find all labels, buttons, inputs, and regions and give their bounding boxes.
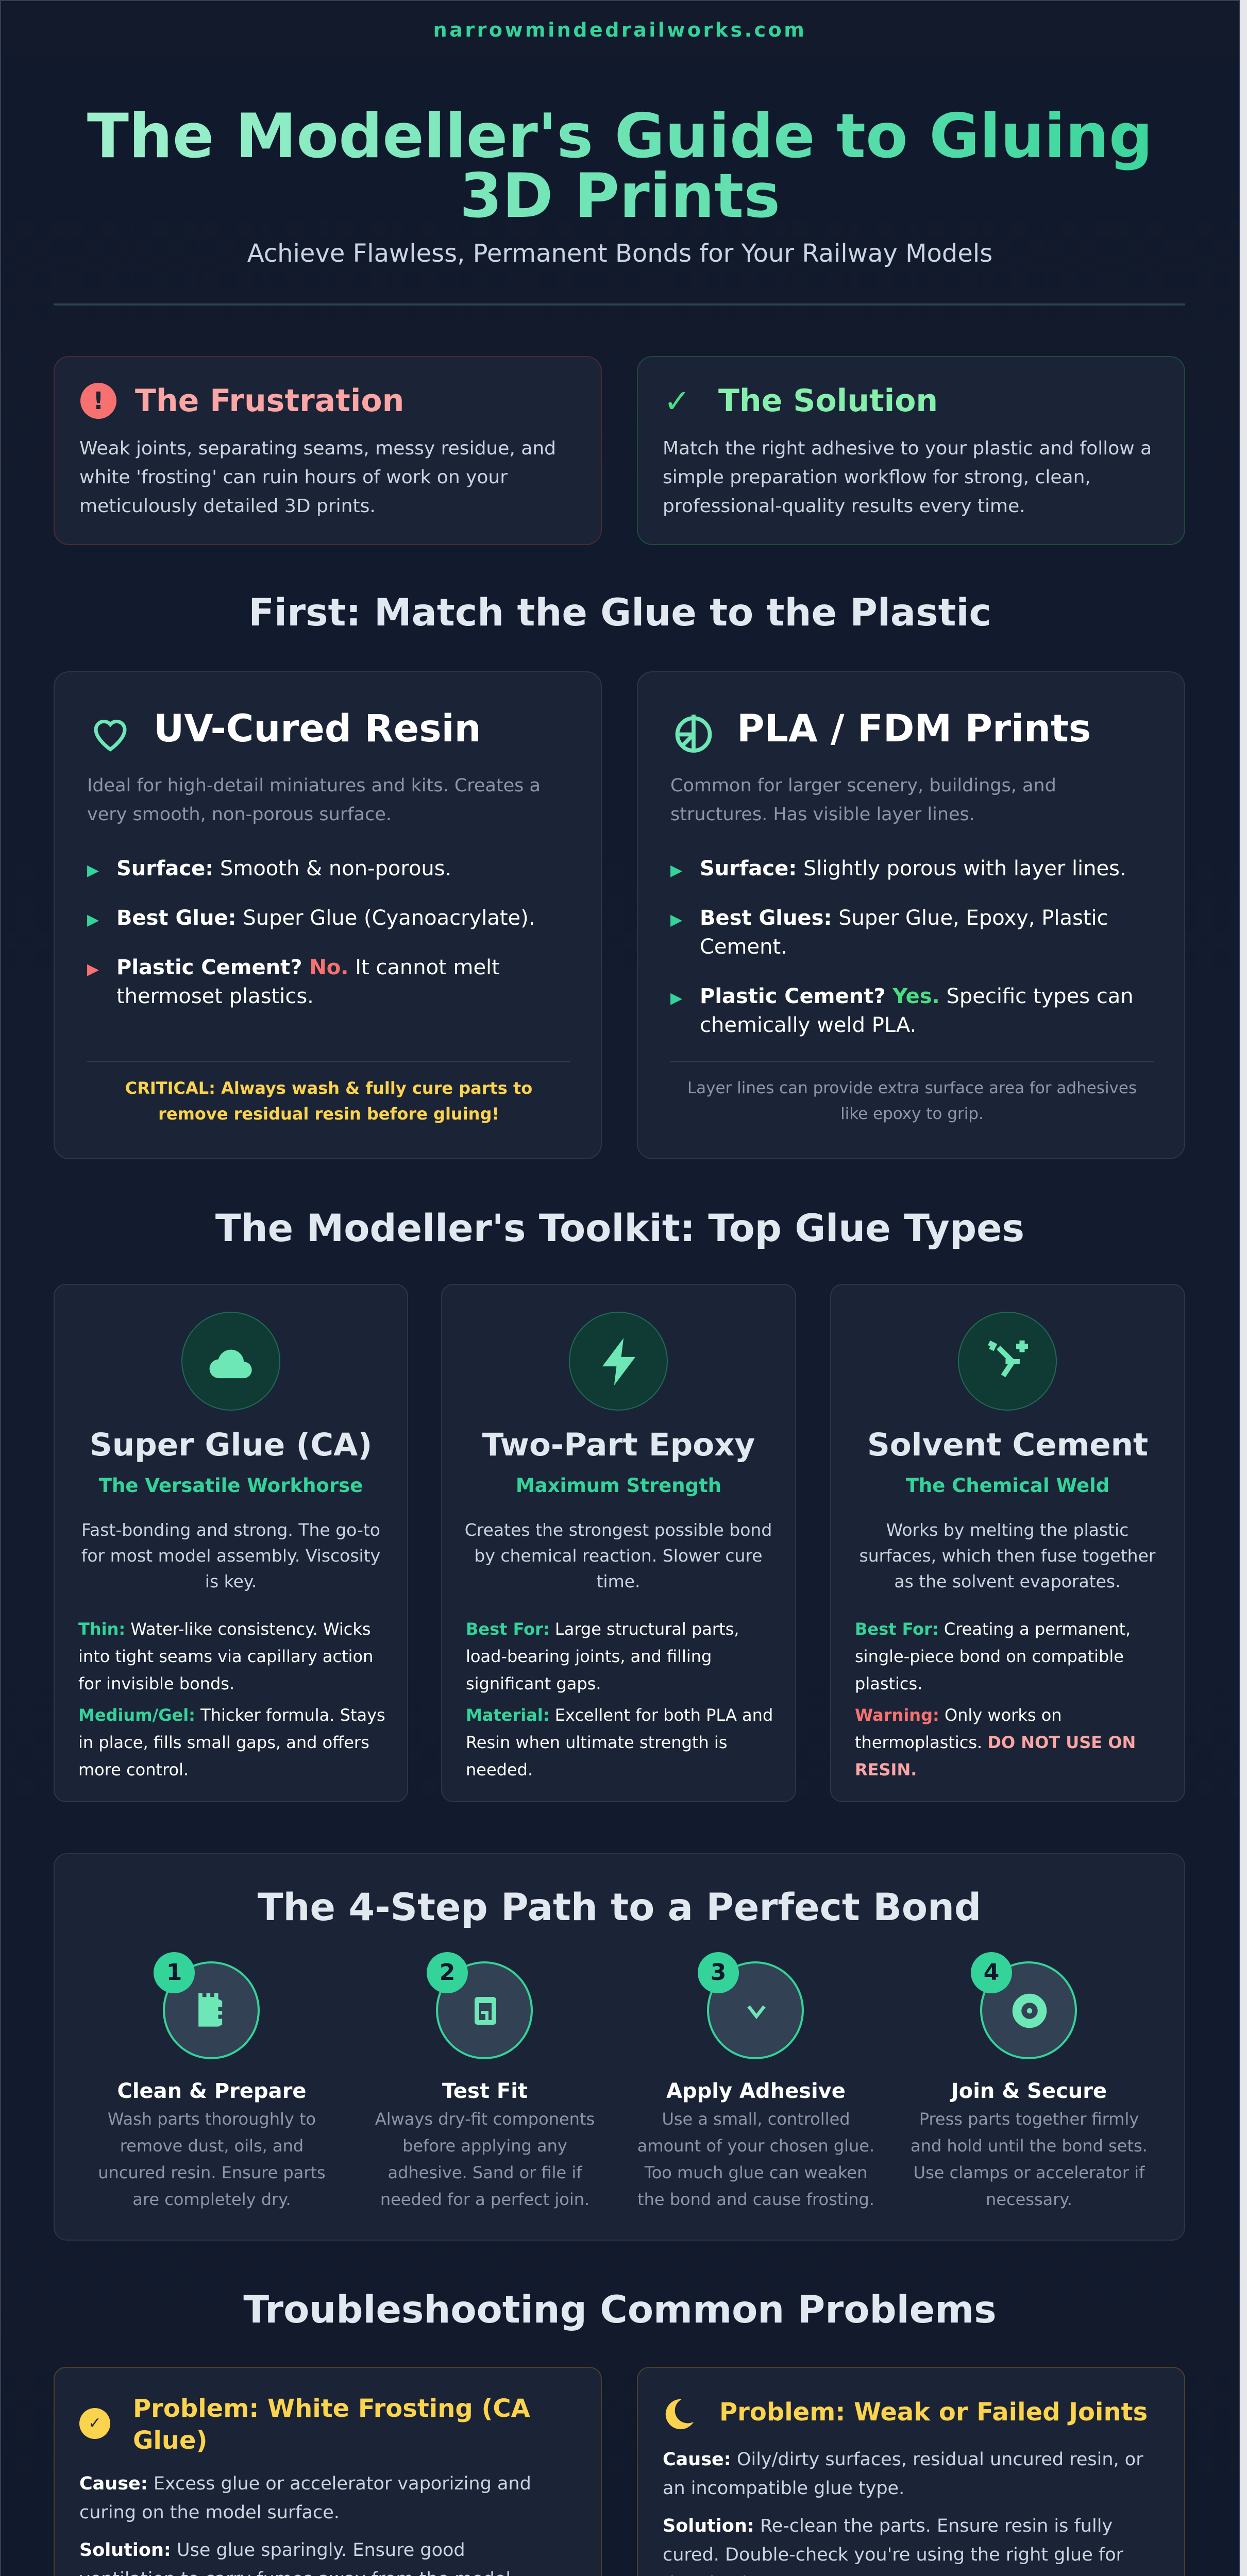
bullets: PLA [670,857,1134,1037]
step 3 [637,1952,874,2209]
subtitle: strength: Maximum Strength [516,1475,721,1497]
heading: solvent: Solvent Cement [867,1427,1148,1463]
heading: 4 steps: The 4-Step Path to a Perfect Bond [258,1886,981,1929]
bullets: PLA: ▶ [670,989,682,1007]
step 3: Apply Adhesive [666,2079,846,2103]
icon: frosting: ✓ [88,2414,102,2432]
step 1 [98,1952,326,2209]
panel: solvent [830,1284,1185,1802]
text: best for / material [466,1619,773,1780]
icon: moon [666,2399,694,2430]
title [1,107,1239,226]
text: joints cause/solution [663,2449,1143,2576]
bullets: PLA: chemically weld PLA. [700,1013,916,1037]
site url: narrowmindedrailworks.com [433,19,806,41]
icon: alert [80,383,116,419]
text: best for / warning [855,1619,1136,1780]
heading: frustration: The Frustration [135,383,404,419]
text: best for / warning: Warning: Only works on thermoplastics. DO NOT USE ON RESIN. [855,1705,1136,1780]
heading: frosting: Problem: White Frosting (CA Glue) [133,2394,530,2455]
panel: frustration [54,356,602,545]
subtitle: chemical weld: The Chemical Weld [906,1475,1109,1497]
text: solution: Match the right adhesive to your plastic and follow a simple preparation workflow for strong, clean, professional-quality results every time. [663,438,1152,517]
text: best for / material: Best For: Large structural parts, load-bearing joints, and filling significant gaps. [466,1619,739,1693]
text: thin / medium: Medium/Gel: Thicker formula. Stays in place, fills small gaps, and offers more control. [78,1705,385,1780]
bullets: PLA: ▶ [670,861,682,879]
heading: troubleshooting: Troubleshooting Common Problems [243,2288,997,2332]
text: thin / medium: Thin: Water-like consistency. Wicks into tight seams via capillary action for invisible bonds. [78,1619,373,1693]
panel: UV resin [54,671,602,1159]
step 1: Wash parts thoroughly to remove dust, oils, and uncured resin. Ensure parts are completely dry. [98,2109,326,2209]
panel: 4-step path [54,1853,1185,2241]
icon: check: ✓ [664,382,690,420]
text: PLA desc: Common for larger scenery, buildings, and [670,775,1056,796]
text: resin desc: Ideal for high-detail miniatures and kits. Creates a very smooth, non-porous surface. [87,775,541,825]
heading: PLA: PLA / FDM Prints [737,707,1091,751]
step 2: Always dry-fit components before applying any adhesive. Sand or file if needed for a perfect join. [375,2109,595,2209]
bullets: resin: Surface: Smooth & non-porous. [116,857,451,880]
heading: resin: UV-Cured Resin [154,707,481,751]
text: best for / material: Material: Excellent for both PLA and Resin when ultimate strength is needed. [466,1705,773,1780]
icon: alert: ! [93,387,104,415]
text: best for / warning: Best For: Creating a permanent, single-piece bond on compatible plastics. [855,1619,1131,1693]
panel: PLA [637,671,1185,1159]
bullets: resin: thermoset plastics. [116,985,314,1008]
header band [1,1,1239,57]
text: joints cause/solution: Cause: Oily/dirty surfaces, residual uncured resin, or an incompatible glue type. [663,2449,1143,2499]
bullets: resin: Best Glue: Super Glue (Cyanoacrylate). [116,906,535,930]
text: PLA desc: structures. Has visible layer lines. [670,804,975,825]
text: layer lines note: like epoxy to grip. [840,1105,984,1123]
text: layer lines note: Layer lines can provide extra surface area for adhesives [687,1079,1137,1097]
step 1: 1 [166,1959,182,1986]
bullets: PLA: Best Glues: Super Glue, Epoxy, Plastic [700,906,1108,930]
text: solvent desc: Works by melting the plastic surfaces, which then fuse together as the solvent evaporates. [860,1520,1155,1591]
icon: cloud [181,1312,280,1411]
step 2 [375,1952,595,2209]
step 3: Use a small, controlled amount of your chosen glue. Too much glue can weaken the bond and cause frosting. [637,2109,874,2209]
text: super glue desc: Fast-bonding and strong. The go-to for most model assembly. Viscosity is key. [81,1520,380,1591]
bullets: PLA: Plastic Cement? Yes. Specific types can [700,985,1134,1008]
icon: heart [94,719,127,752]
step 2: 2 [440,1959,455,1986]
step 1: Clean & Prepare [117,2079,307,2103]
heading: toolkit: The Modeller's Toolkit: Top Glue Types [215,1207,1024,1250]
heading: super glue: Super Glue (CA) [90,1427,372,1463]
panel: solution [637,356,1185,545]
bullets: resin: ▶ [87,960,99,978]
bullets: resin [87,857,535,1008]
subtitle: versatile: The Versatile Workhorse [99,1475,363,1497]
step 4 [911,1952,1148,2209]
step 3: 3 [711,1959,726,1986]
bullets: resin: ▶ [87,861,99,879]
heading: weak joints: Problem: Weak or Failed Joints [719,2398,1148,2427]
bullets: PLA: ▶ [670,911,682,929]
icon: frosting [79,2408,110,2439]
bullets: PLA: Surface: Slightly porous with layer lines. [700,857,1126,880]
heading: match glue: First: Match the Glue to the Plastic [248,591,991,635]
icon: bolt [569,1312,668,1411]
text: PLA desc [670,775,1056,825]
callout: critical: remove residual resin before gluing! [158,1104,499,1124]
text: layer lines note [687,1079,1137,1123]
step 4: Join & Secure [951,2079,1107,2103]
title: 3D Prints [460,161,780,232]
title: The Modeller's Guide to Gluing [87,101,1153,172]
bullets: resin: Plastic Cement? No. It cannot melt [116,956,500,979]
heading: epoxy: Two-Part Epoxy [482,1427,755,1463]
panel: weak joints [637,2367,1185,2576]
panel: epoxy [441,1284,796,1802]
heading: solution: The Solution [718,383,938,419]
text: epoxy desc: Creates the strongest possible bond by chemical reaction. Slower cure time. [465,1520,772,1591]
step 2: Test Fit [442,2079,528,2103]
step 4: 4 [984,1959,999,1986]
bullets: PLA: Cement. [700,935,787,959]
text: frosting cause/solution [79,2473,531,2576]
text: thin / medium [78,1619,385,1780]
icon: sparkle [958,1312,1057,1411]
step 4: Press parts together firmly and hold until the bond sets. Use clamps or accelerator if necessary. [911,2109,1148,2209]
callout: critical [125,1078,532,1124]
bullets: resin: ▶ [87,911,99,929]
icon: pie [675,715,712,753]
text: frosting cause/solution: Cause: Excess glue or accelerator vaporizing and curing on the model surface. [79,2473,531,2523]
subtitle: Achieve Flawless, Permanent Bonds for Your Railway Models [247,239,992,268]
callout: critical: CRITICAL: Always wash & fully cure parts to [125,1078,532,1098]
panel: white frosting [54,2367,602,2576]
text: frustration: Weak joints, separating seams, messy residue, and white 'frosting' can ruin hours of work on your meticulously detailed 3D prints. [79,438,556,517]
panel: super glue [54,1284,408,1802]
